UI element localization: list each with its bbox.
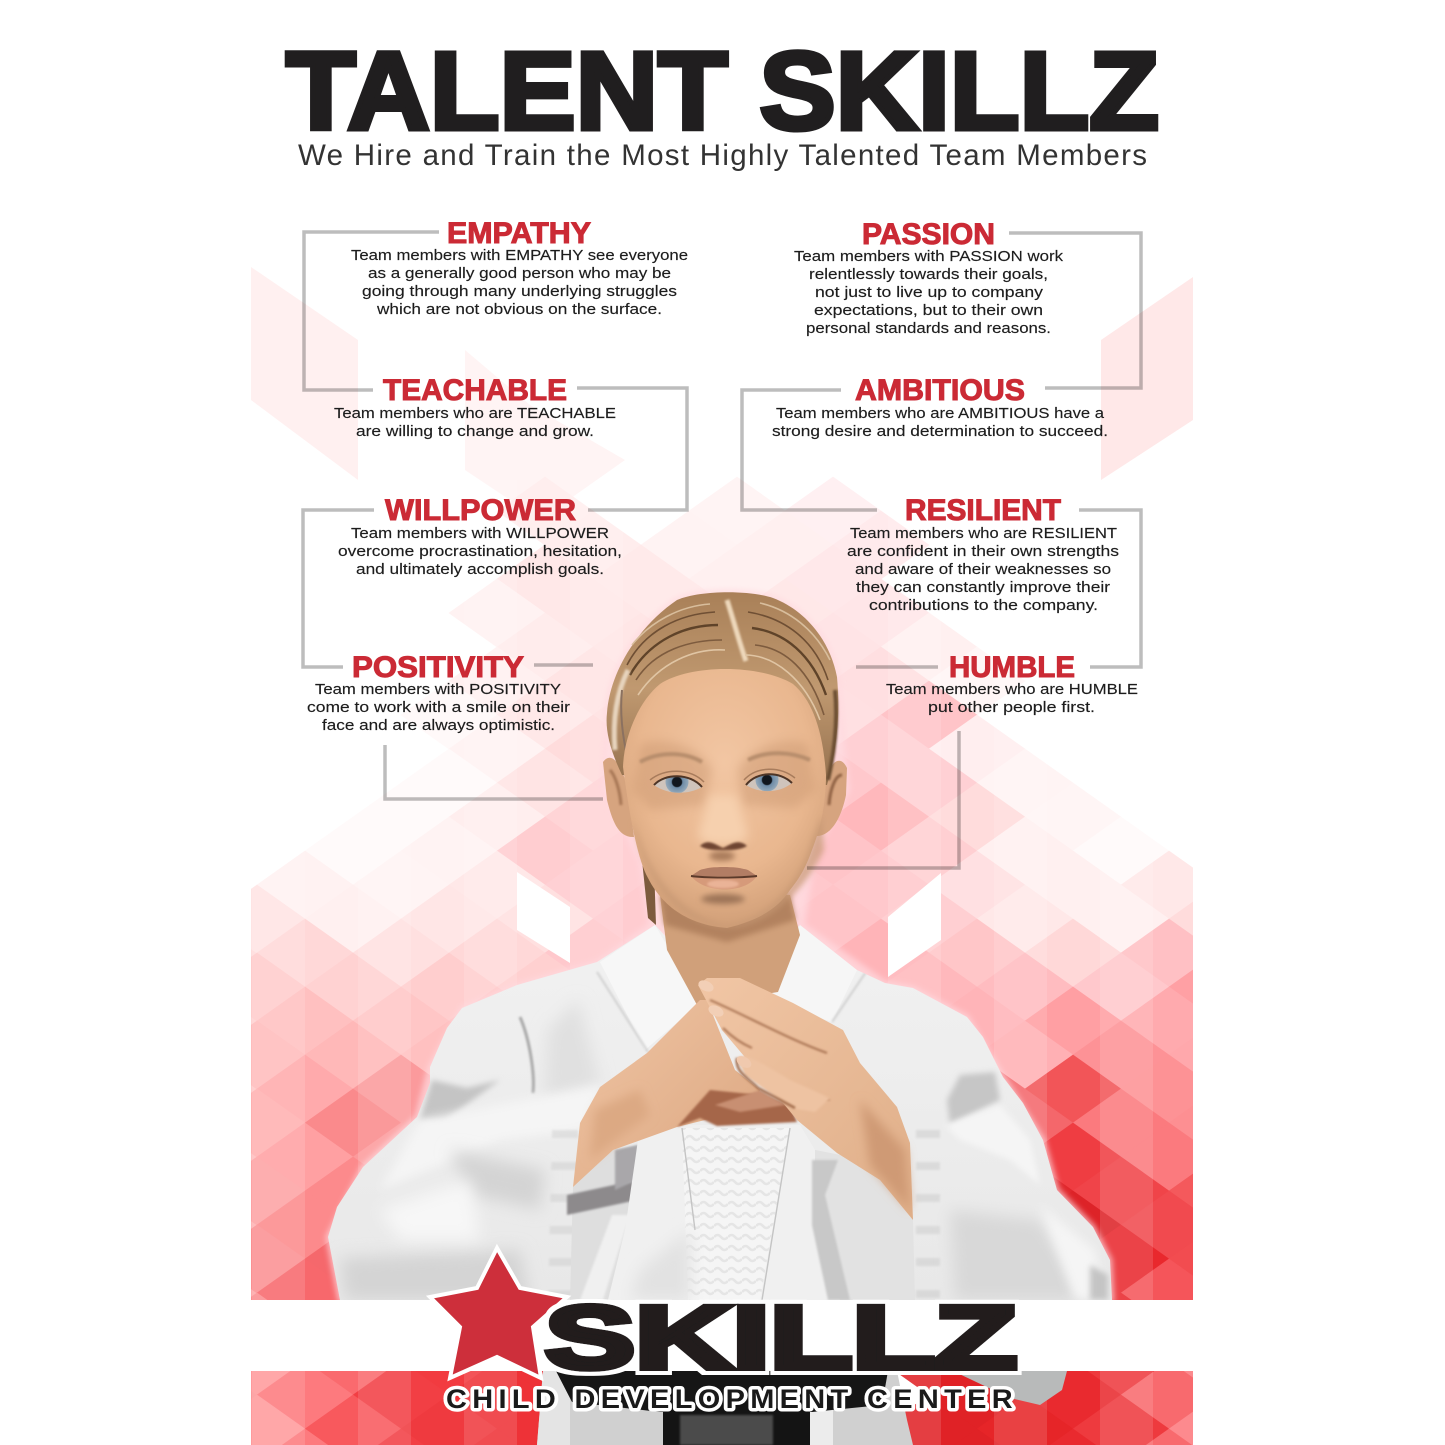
- text: resilient description: and aware of their weaknesses so: [855, 561, 1111, 578]
- hands clasped: [573, 978, 913, 1220]
- panel: ambitious: [772, 374, 1108, 440]
- neck: [660, 895, 800, 1005]
- connector: humble to girl: [807, 731, 959, 868]
- text: passion description: not just to live up to company: [815, 284, 1043, 301]
- text: humble description: put other people first.: [928, 699, 1095, 716]
- panel: positivity: [307, 651, 570, 734]
- text: passion description: relentlessly towards their goals,: [809, 266, 1048, 283]
- panel: resilient: [847, 494, 1119, 614]
- text: positivity description: come to work with a smile on their: [307, 699, 570, 716]
- heading: humble: HUMBLE: [949, 651, 1075, 684]
- gi: left sleeve shading: [450, 1150, 545, 1210]
- text: empathy description: Team members with EMPATHY see everyone: [351, 247, 688, 264]
- hair: [607, 592, 838, 785]
- ears: [603, 758, 847, 837]
- mouth: [691, 867, 757, 890]
- illustration: girl in karate gi: [328, 592, 1112, 1445]
- text: resilient description: are confident in their own strengths: [847, 543, 1119, 560]
- text: positivity description: [307, 681, 570, 734]
- connector: ambitious to resilient: [742, 390, 877, 510]
- hand: right: [698, 978, 913, 1220]
- heading: passion: PASSION: [862, 218, 995, 251]
- gi upper body: [328, 925, 1112, 1300]
- subtitle: We Hire and Train the Most Highly Talented Team Members: [298, 139, 1147, 172]
- text: empathy description: going through many underlying struggles: [362, 283, 677, 300]
- text: resilient description: [847, 525, 1119, 614]
- gi: under-arm opening: [570, 1150, 628, 1300]
- text: ambitious description: Team members who are AMBITIOUS have a: [776, 405, 1105, 422]
- gi: left arm folds: [420, 1080, 500, 1120]
- text: positivity description: face and are always optimistic.: [322, 717, 555, 734]
- text: positivity description: Team members with POSITIVITY: [315, 681, 561, 698]
- connector: humble left stub: [856, 665, 938, 669]
- panel: teachable: [334, 374, 616, 440]
- title: TALENT SKILLZ: [286, 30, 1159, 153]
- text: resilient description: Team members who are RESILIENT: [850, 525, 1117, 542]
- eye left: [650, 770, 704, 794]
- text: teachable description: [334, 405, 616, 440]
- panel: willpower: [338, 494, 622, 578]
- heading: empathy: EMPATHY: [447, 217, 591, 250]
- text: willpower description: overcome procrastination, hesitation,: [338, 543, 622, 560]
- hand: left: [573, 1000, 760, 1187]
- connector: positivity right stub: [534, 663, 593, 667]
- text: passion description: personal standards and reasons.: [806, 320, 1051, 337]
- connector: resilient to humble: [1079, 510, 1141, 667]
- braid: [642, 866, 656, 925]
- text: willpower description: Team members with WILLPOWER: [351, 525, 609, 542]
- text: ambitious description: [772, 405, 1108, 440]
- heading: positivity: POSITIVITY: [352, 651, 524, 684]
- soft glow around figure: [328, 592, 1112, 1300]
- logo tagline: CHILD DEVELOPMENT CENTER: [446, 1384, 1018, 1414]
- panel: empathy: [351, 217, 688, 318]
- text: empathy description: as a generally good person who may be: [368, 265, 671, 282]
- connector: passion to ambitious: [1009, 233, 1141, 388]
- gi: chest panel: [608, 1144, 640, 1300]
- gi: right under-arm: [815, 1150, 915, 1300]
- heading: ambitious: AMBITIOUS: [855, 374, 1025, 407]
- text: empathy description: which are not obvious on the surface.: [376, 301, 662, 318]
- icon: red star: [430, 1248, 567, 1378]
- connector: willpower to positivity: [303, 510, 374, 667]
- text: empathy description: [351, 247, 688, 318]
- panel: humble: [886, 651, 1138, 716]
- text: ambitious description: strong desire and determination to succeed.: [772, 423, 1108, 440]
- gi: lapels: [626, 1009, 688, 1047]
- face: [623, 669, 826, 928]
- text: passion description: Team members with PASSION work: [794, 248, 1063, 265]
- panel: passion: [794, 218, 1063, 337]
- text: willpower description: and ultimately accomplish goals.: [356, 561, 604, 578]
- heading: teachable: TEACHABLE: [383, 374, 567, 407]
- hands: shadow fold: [677, 1090, 797, 1127]
- text: resilient description: contributions to the company.: [869, 597, 1098, 614]
- gi: shading clipped to silhouette: [340, 925, 1108, 1300]
- text: teachable description: are willing to change and grow.: [356, 423, 594, 440]
- white logo band: [251, 1300, 1193, 1371]
- text: passion description: [794, 248, 1063, 337]
- text: humble description: [886, 681, 1138, 716]
- logo: skillz child development center: [430, 1248, 1018, 1414]
- gi: right sleeve: [916, 1130, 940, 1300]
- heading: resilient: RESILIENT: [905, 494, 1061, 527]
- text: humble description: Team members who are HUMBLE: [886, 681, 1138, 698]
- text: resilient description: they can constantly improve their: [856, 579, 1110, 596]
- heading: willpower: WILLPOWER: [385, 494, 576, 527]
- background: red geometric mosaic: [251, 267, 1193, 1445]
- connector: positivity to girl: [385, 745, 603, 799]
- connector: empathy to teachable: [304, 232, 439, 390]
- text: passion description: expectations, but to their own: [814, 302, 1043, 319]
- nose: [698, 795, 748, 845]
- eye right: [744, 768, 795, 792]
- logo wordmark: SKILLZ: [545, 1287, 1017, 1387]
- gi lower part with black belt: [537, 1371, 1067, 1445]
- brows: [640, 753, 810, 762]
- connector: teachable to willpower: [577, 388, 687, 510]
- text: willpower description: [338, 525, 622, 578]
- text: teachable description: Team members who are TEACHABLE: [334, 405, 616, 422]
